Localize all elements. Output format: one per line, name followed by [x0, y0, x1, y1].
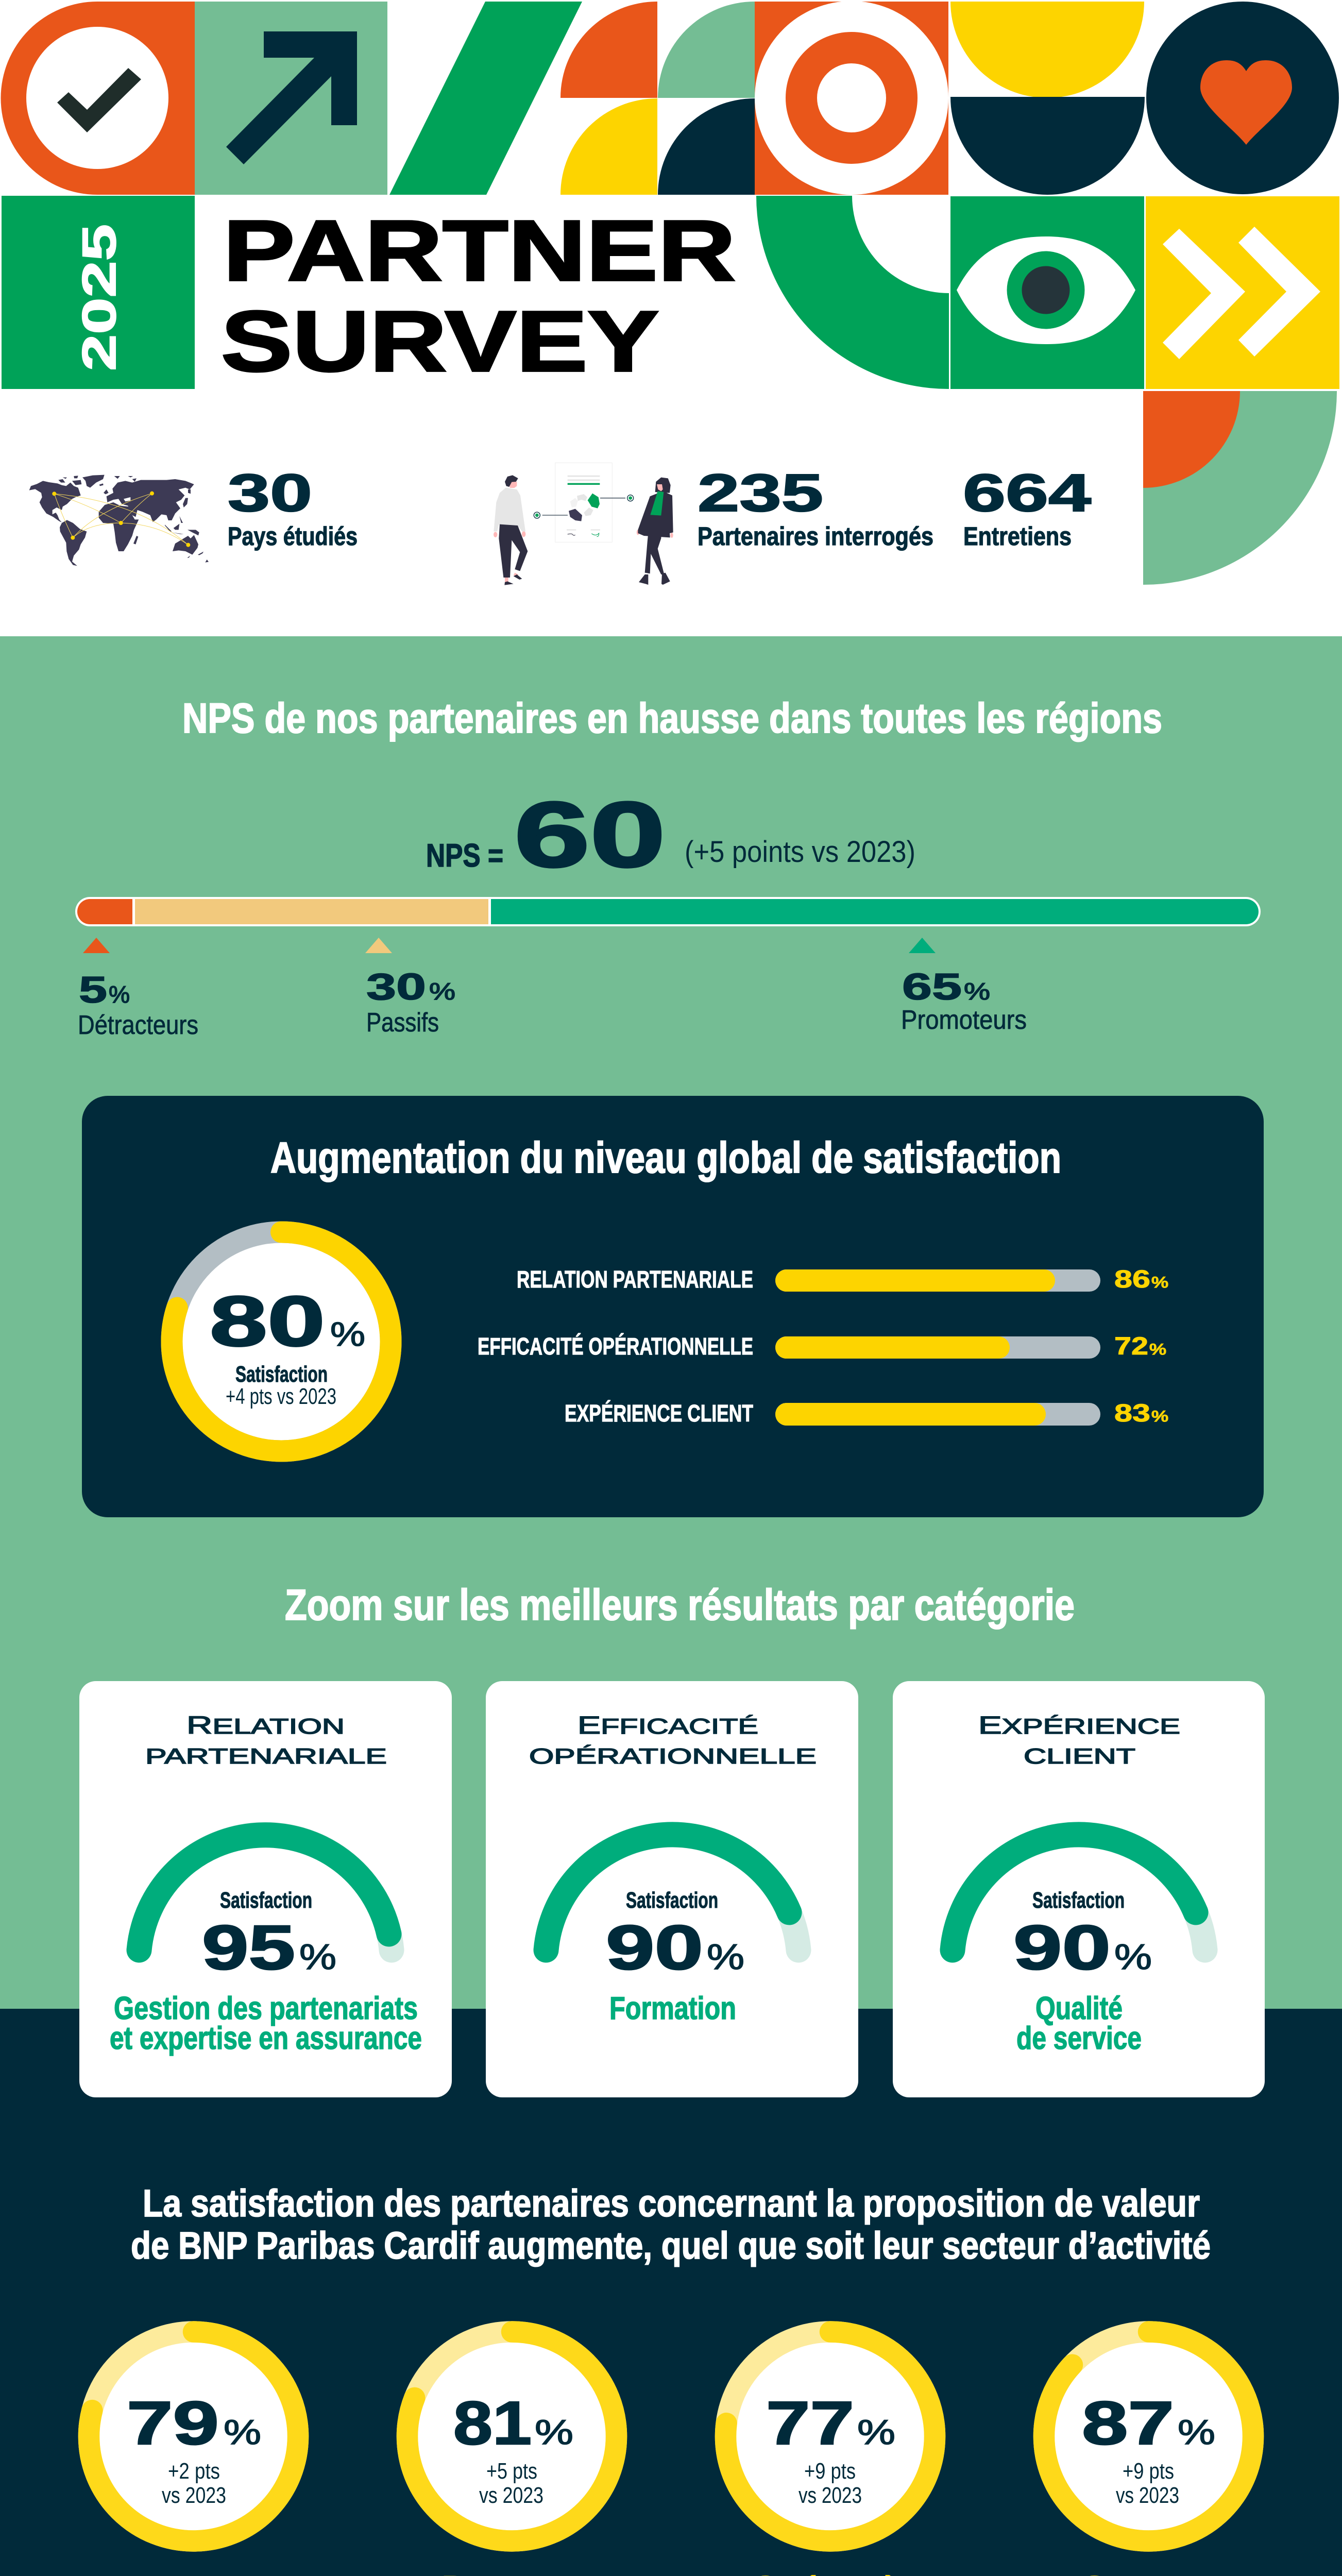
stat: 235 partenaires: [698, 463, 933, 551]
donut: banque de détail: %: [535, 2413, 573, 2452]
panel: overall satisfaction: [82, 1096, 1264, 1517]
NPS breakdown: passifs: %: [429, 978, 455, 1005]
icon: two people and a report: [494, 463, 673, 585]
stat: 235 partenaires: 235: [698, 463, 823, 522]
bar: relation partenariale: %: [1151, 1274, 1168, 1291]
heading: zoom categories: Zoom sur les meilleurs résultats par catégorie: [285, 1581, 1075, 1629]
NPS score: [426, 783, 915, 887]
heading: value proposition: La satisfaction des partenaires concernant la proposition de valeur: [143, 2182, 1200, 2225]
bar: relation partenariale: [517, 1266, 1168, 1293]
tile: growth arrow: [195, 2, 387, 195]
card: expérience client: %: [1114, 1937, 1152, 1977]
donut: grande distribution: +9 pts: [1123, 2459, 1174, 2484]
bar: expérience client: EXPÉRIENCE CLIENT: [565, 1400, 753, 1427]
card: efficacité opérationnelle: %: [707, 1937, 744, 1977]
NPS breakdown: détracteurs: 5: [79, 970, 107, 1011]
tile: half circles: [950, 2, 1145, 195]
bar: efficacité opérationnelle: %: [1149, 1341, 1166, 1358]
card: expérience client: 90: [1013, 1912, 1111, 1982]
key figures: [29, 463, 1091, 585]
NPS breakdown: promoteurs: Promoteurs: [901, 1005, 1027, 1035]
title: [221, 203, 736, 389]
donut: grande distribution: vs 2023: [1116, 2483, 1179, 2508]
card: expérience client: Qualité: [1035, 1991, 1123, 2026]
tile: eye: [950, 196, 1144, 389]
bar: efficacité opérationnelle: 72: [1114, 1333, 1148, 1360]
tile: chevrons: [1146, 196, 1339, 389]
NPS breakdown: détracteurs: %: [109, 981, 130, 1008]
NPS score: (+5 points vs 2023): [685, 835, 915, 869]
card: efficacité opérationnelle: OPÉRATIONNELLE: [529, 1744, 817, 1768]
donut: banque de détail: vs 2023: [479, 2483, 543, 2508]
card: expérience client: Satisfaction: [1032, 1888, 1125, 1913]
stat: 664 entretiens: 664: [963, 463, 1091, 522]
title: SURVEY: [221, 294, 659, 389]
tile: four quarter circles: [560, 2, 755, 195]
card: efficacité opérationnelle: E FFICACITÉ: [577, 1712, 758, 1739]
card: relation partenariale: Satisfaction: [220, 1888, 312, 1913]
panel: navy section background: [0, 2009, 1342, 2576]
bar: relation partenariale: 86: [1114, 1266, 1150, 1293]
card: relation partenariale: Gestion des partenariats: [114, 1991, 418, 2026]
donut: crédit à la consommation: 77: [766, 2389, 854, 2458]
tile: check badge: [1, 2, 195, 195]
tile: heart: [1146, 2, 1339, 194]
card: relation partenariale: PARTENARIALE: [145, 1744, 387, 1768]
panel: green section background: [0, 636, 1342, 2009]
NPS breakdown: passifs: [365, 938, 455, 1038]
tile: orange and green quarter: [1143, 391, 1337, 585]
bar: efficacité opérationnelle: EFFICACITÉ OPÉRATIONNELLE: [478, 1333, 753, 1360]
tile: year 2025: 2025: [73, 224, 126, 371]
tile: green quarter ring: [756, 196, 949, 389]
donut: banque de détail: +5 pts: [486, 2459, 537, 2484]
donut: grande distribution: %: [1178, 2413, 1215, 2452]
NPS breakdown: passifs: Passifs: [366, 1008, 439, 1038]
card: efficacité opérationnelle: [486, 1681, 858, 2097]
bar: relation partenariale: RELATION PARTENARIALE: [517, 1266, 753, 1293]
donut: 80% satisfaction: [172, 1232, 390, 1451]
card: relation partenariale: %: [299, 1937, 336, 1977]
NPS breakdown: promoteurs: [901, 938, 1027, 1035]
donut: 80% satisfaction: 80: [210, 1282, 325, 1361]
NPS breakdown: détracteurs: Détracteurs: [78, 1010, 198, 1040]
heading: NPS: NPS de nos partenaires en hausse dans toutes les régions: [182, 695, 1162, 742]
donut: banque de détail: 81: [453, 2389, 532, 2458]
tile: year 2025: [2, 196, 195, 389]
donut: grande distribution: [1038, 2332, 1268, 2576]
NPS score: 60: [514, 783, 666, 887]
card: expérience client: [893, 1681, 1265, 2097]
card: efficacité opérationnelle: Formation: [609, 1991, 736, 2026]
NPS breakdown: promoteurs: %: [964, 978, 990, 1005]
stat: 235 partenaires: Partenaires interrogés: [698, 522, 933, 551]
stat: 30 pays: [228, 463, 358, 551]
card: expérience client: CLIENT: [1024, 1744, 1135, 1768]
title: PARTNER: [223, 203, 736, 299]
donut: automobile: 79: [127, 2389, 219, 2458]
bar: expérience client: %: [1151, 1408, 1168, 1425]
bar: expérience client: 83: [1114, 1400, 1150, 1427]
stat: 664 entretiens: Entretiens: [963, 522, 1072, 551]
icon: world map: [29, 475, 209, 566]
donut: 80% satisfaction: +4 pts vs 2023: [226, 1384, 336, 1409]
donut: crédit à la consommation: [668, 2332, 992, 2576]
donut: 80% satisfaction: Satisfaction: [235, 1362, 328, 1387]
panel heading: Augmentation du niveau global de satisfaction: [270, 1133, 1061, 1182]
donut: automobile: [83, 2332, 304, 2576]
donut: grande distribution: 87: [1082, 2389, 1174, 2458]
NPS breakdown: détracteurs: [78, 938, 198, 1040]
stat: 664 entretiens: [963, 463, 1091, 551]
card: expérience client: E XPÉRIENCE: [978, 1712, 1180, 1739]
card: expérience client: de service: [1016, 2021, 1142, 2056]
donut: crédit à la consommation: vs 2023: [799, 2483, 862, 2508]
donut: banque de détail: [407, 2332, 616, 2576]
donut: crédit à la consommation: +9 pts: [804, 2459, 856, 2484]
donut: automobile: vs 2023: [162, 2483, 226, 2508]
donut: automobile: +2 pts: [168, 2459, 220, 2484]
NPS breakdown: promoteurs: 65: [902, 967, 962, 1008]
card: efficacité opérationnelle: 90: [606, 1912, 703, 1982]
NPS breakdown: passifs: 30: [366, 967, 426, 1008]
header mosaic: [1, 1, 1339, 585]
donut: 80% satisfaction: %: [330, 1315, 365, 1353]
stat: 30 pays: 30: [228, 463, 312, 522]
card: relation partenariale: R ELATION: [186, 1712, 345, 1739]
card: relation partenariale: 95: [202, 1912, 295, 1982]
card: efficacité opérationnelle: Satisfaction: [626, 1888, 718, 1913]
card: relation partenariale: et expertise en assurance: [110, 2021, 422, 2056]
bar: efficacité opérationnelle: [478, 1333, 1166, 1360]
donut: automobile: %: [224, 2413, 261, 2452]
tile: target: [755, 1, 948, 195]
tile: green slash: [389, 2, 582, 195]
bar: expérience client: [565, 1400, 1168, 1427]
heading: value proposition: [131, 2182, 1211, 2267]
NPS stacked bar: [75, 897, 1261, 926]
card: relation partenariale: [79, 1681, 452, 2097]
stat: 30 pays: Pays étudiés: [228, 522, 358, 551]
NPS score: NPS =: [426, 838, 503, 874]
donut: crédit à la consommation: %: [857, 2413, 895, 2452]
